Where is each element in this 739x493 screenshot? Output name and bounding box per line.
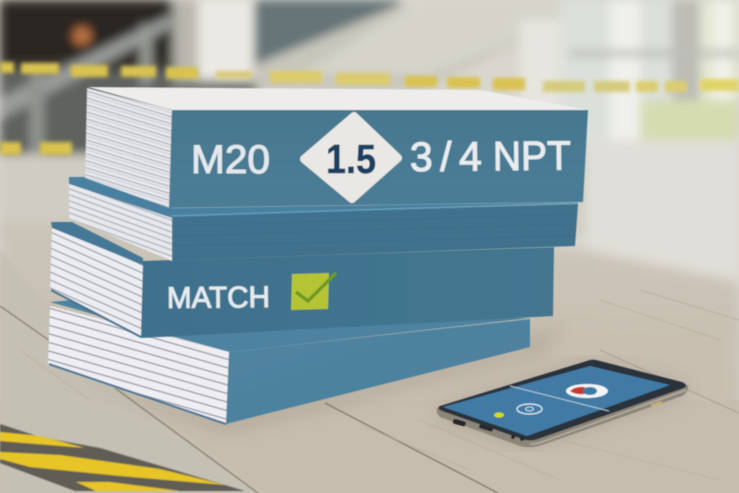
label: 3/4 NPT: NPT	[493, 133, 571, 179]
wooden floor	[0, 222, 739, 493]
icon: yellow dot	[494, 412, 504, 418]
book 2	[69, 177, 578, 261]
phone	[437, 360, 688, 447]
badge: 1.5 diamond: 1.5	[326, 136, 376, 182]
label: M20: M20	[191, 138, 270, 182]
label: 3/4 NPT: 3/4	[410, 133, 482, 180]
icon: ring target	[517, 404, 542, 414]
badge: 1.5 diamond	[304, 116, 398, 199]
book 4: bottom	[48, 300, 530, 424]
blurred yellow barrier tape	[0, 62, 739, 155]
book 3: MATCH	[50, 222, 554, 338]
hazard tape on floor	[0, 424, 245, 491]
label: MATCH: MATCH	[167, 281, 270, 315]
phone ports	[452, 419, 524, 441]
book 1: M20 / 1.5 / 3/4 NPT	[85, 87, 588, 208]
icon: green check box	[291, 273, 336, 310]
icon: red white gauge	[566, 384, 608, 398]
shadow under books	[45, 320, 560, 428]
label: 3/4 NPT	[410, 133, 571, 180]
